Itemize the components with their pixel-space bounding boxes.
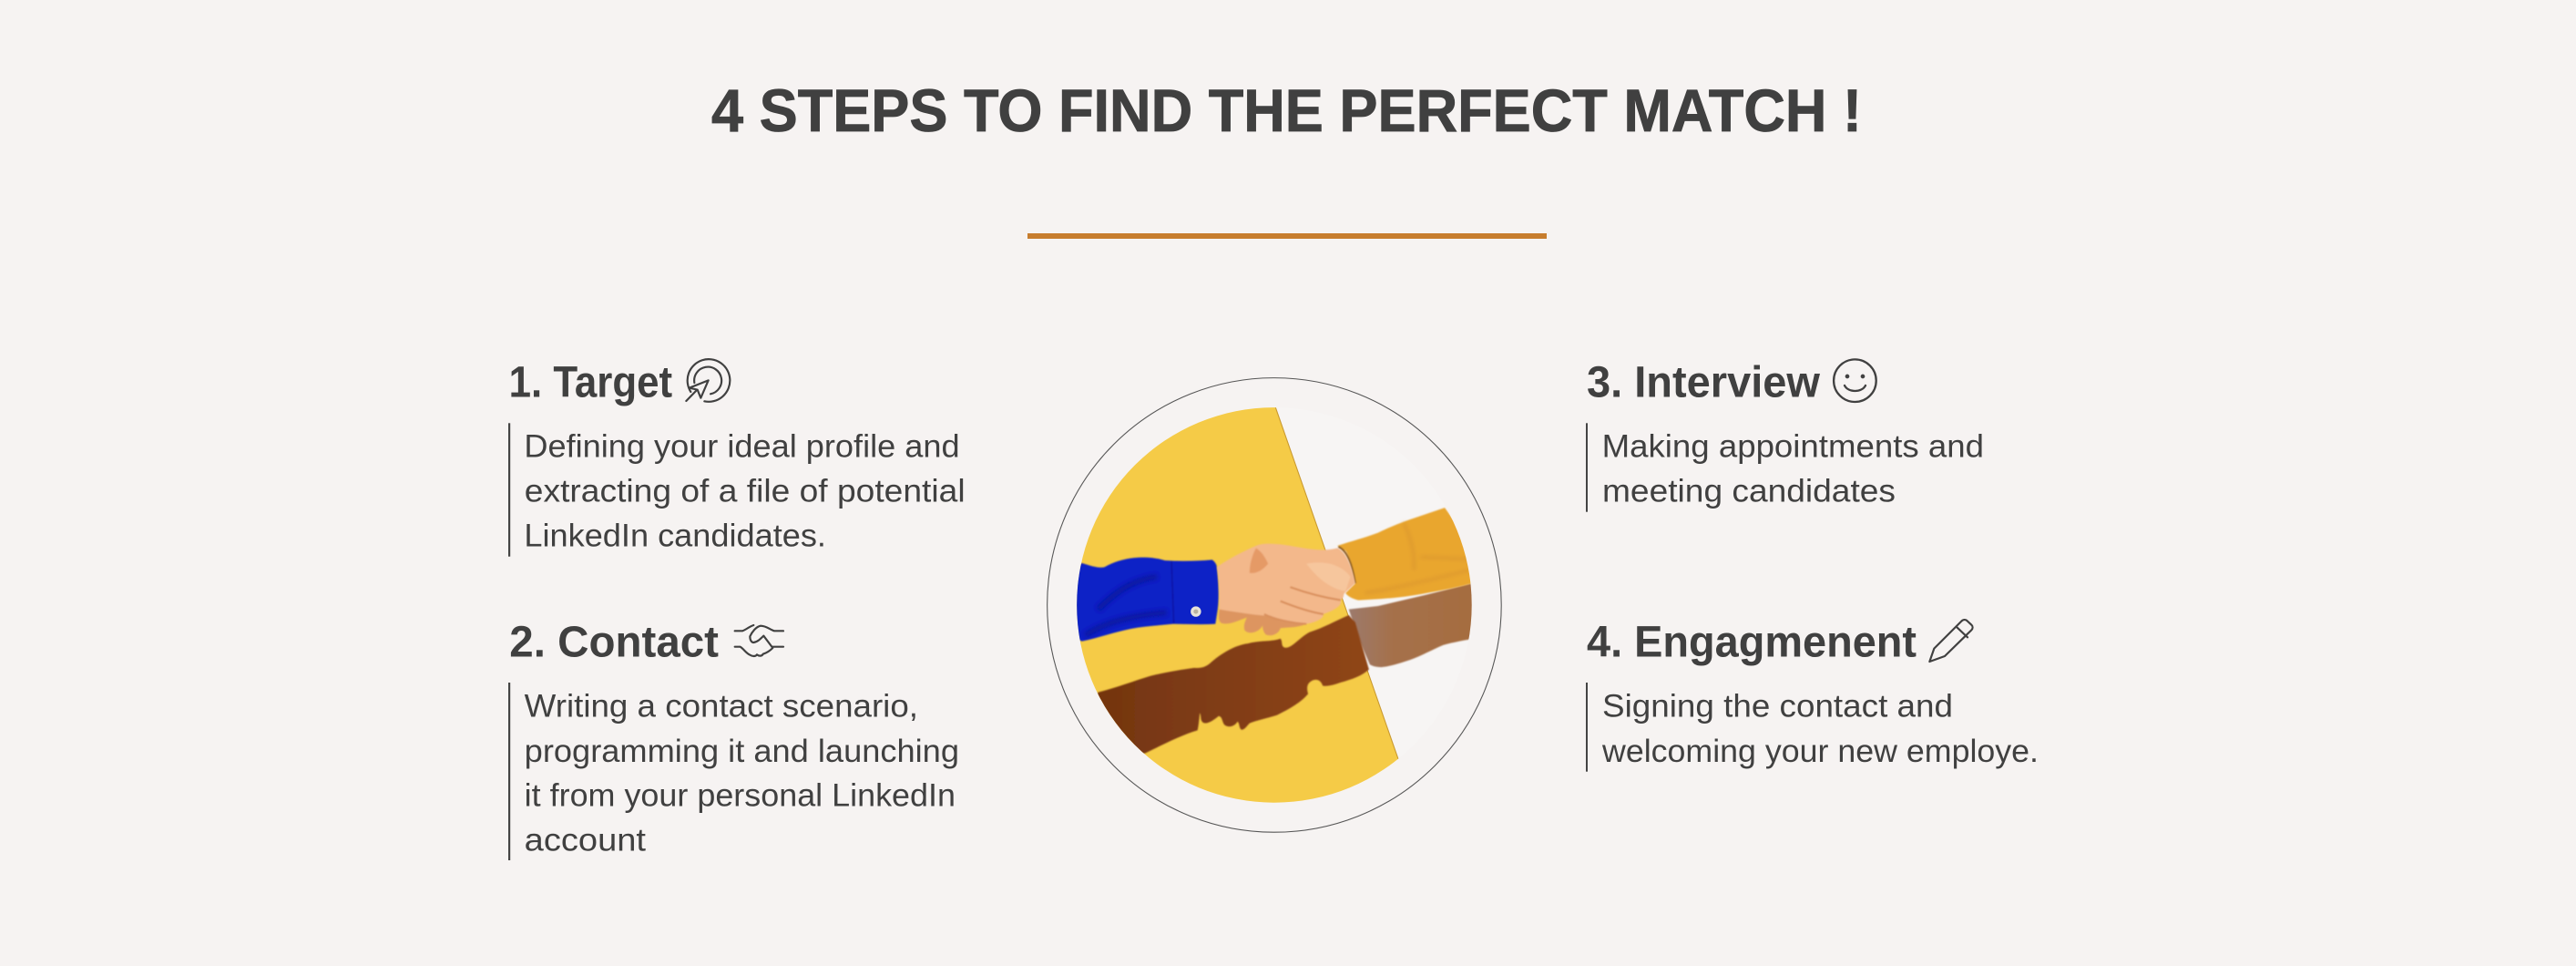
step 2 description: Writing a contact scenario, <box>525 689 918 724</box>
icon: handshake <box>735 625 783 656</box>
hands <box>1217 544 1355 635</box>
panel: step 2 contact <box>508 619 959 860</box>
heading: 2. Contact: 2. Contact <box>509 619 719 667</box>
photo content <box>1077 407 1472 803</box>
step 4 description <box>1586 683 2039 772</box>
step 4 description: Signing the contact and <box>1602 689 1953 724</box>
outer ring <box>1048 378 1501 832</box>
icon: target with cursor <box>686 359 730 402</box>
panel: step 4 engagement <box>1586 619 2039 772</box>
step 1 description: Defining your ideal profile and <box>524 429 960 465</box>
heading: 1. Target: 1. Target <box>509 359 672 407</box>
heading: 3. Interview: 3. Interview <box>1587 359 1821 407</box>
infographic: 4 steps to find the perfect match <box>508 88 2036 860</box>
cuff button <box>1191 606 1201 617</box>
step 1 description <box>508 423 966 557</box>
photo: handshake in circle <box>1048 378 1508 844</box>
step 4 description: welcoming your new employe. <box>1601 734 2039 769</box>
icon: pencil <box>1929 620 1973 662</box>
shadow on yellow wall <box>1085 615 1369 759</box>
title: 4 STEPS TO FIND THE PERFECT MATCH ! <box>711 77 1862 144</box>
shadow on white wall <box>1349 582 1476 667</box>
step 3 description: meeting candidates <box>1602 473 1896 509</box>
orange sleeve <box>1337 508 1476 601</box>
icon: smiley <box>1834 359 1876 402</box>
panel: step 3 interview <box>1586 359 1984 512</box>
blue sleeve <box>1076 558 1219 642</box>
step 1 description: LinkedIn candidates. <box>524 518 826 553</box>
step 3 description: Making appointments and <box>1602 429 1984 465</box>
heading: 4. Engagmenent: 4. Engagmenent <box>1587 619 1917 667</box>
yellow wall <box>1077 407 1398 803</box>
title underline <box>1027 233 1547 239</box>
step 2 description: account <box>525 822 646 858</box>
step 2 description <box>508 683 959 860</box>
step 3 description <box>1586 423 1984 512</box>
panel: step 1 target <box>508 359 966 557</box>
step 2 description: it from your personal LinkedIn <box>525 778 956 814</box>
step 2 description: programming it and launching <box>525 734 959 769</box>
step 1 description: extracting of a file of potential <box>525 473 966 509</box>
